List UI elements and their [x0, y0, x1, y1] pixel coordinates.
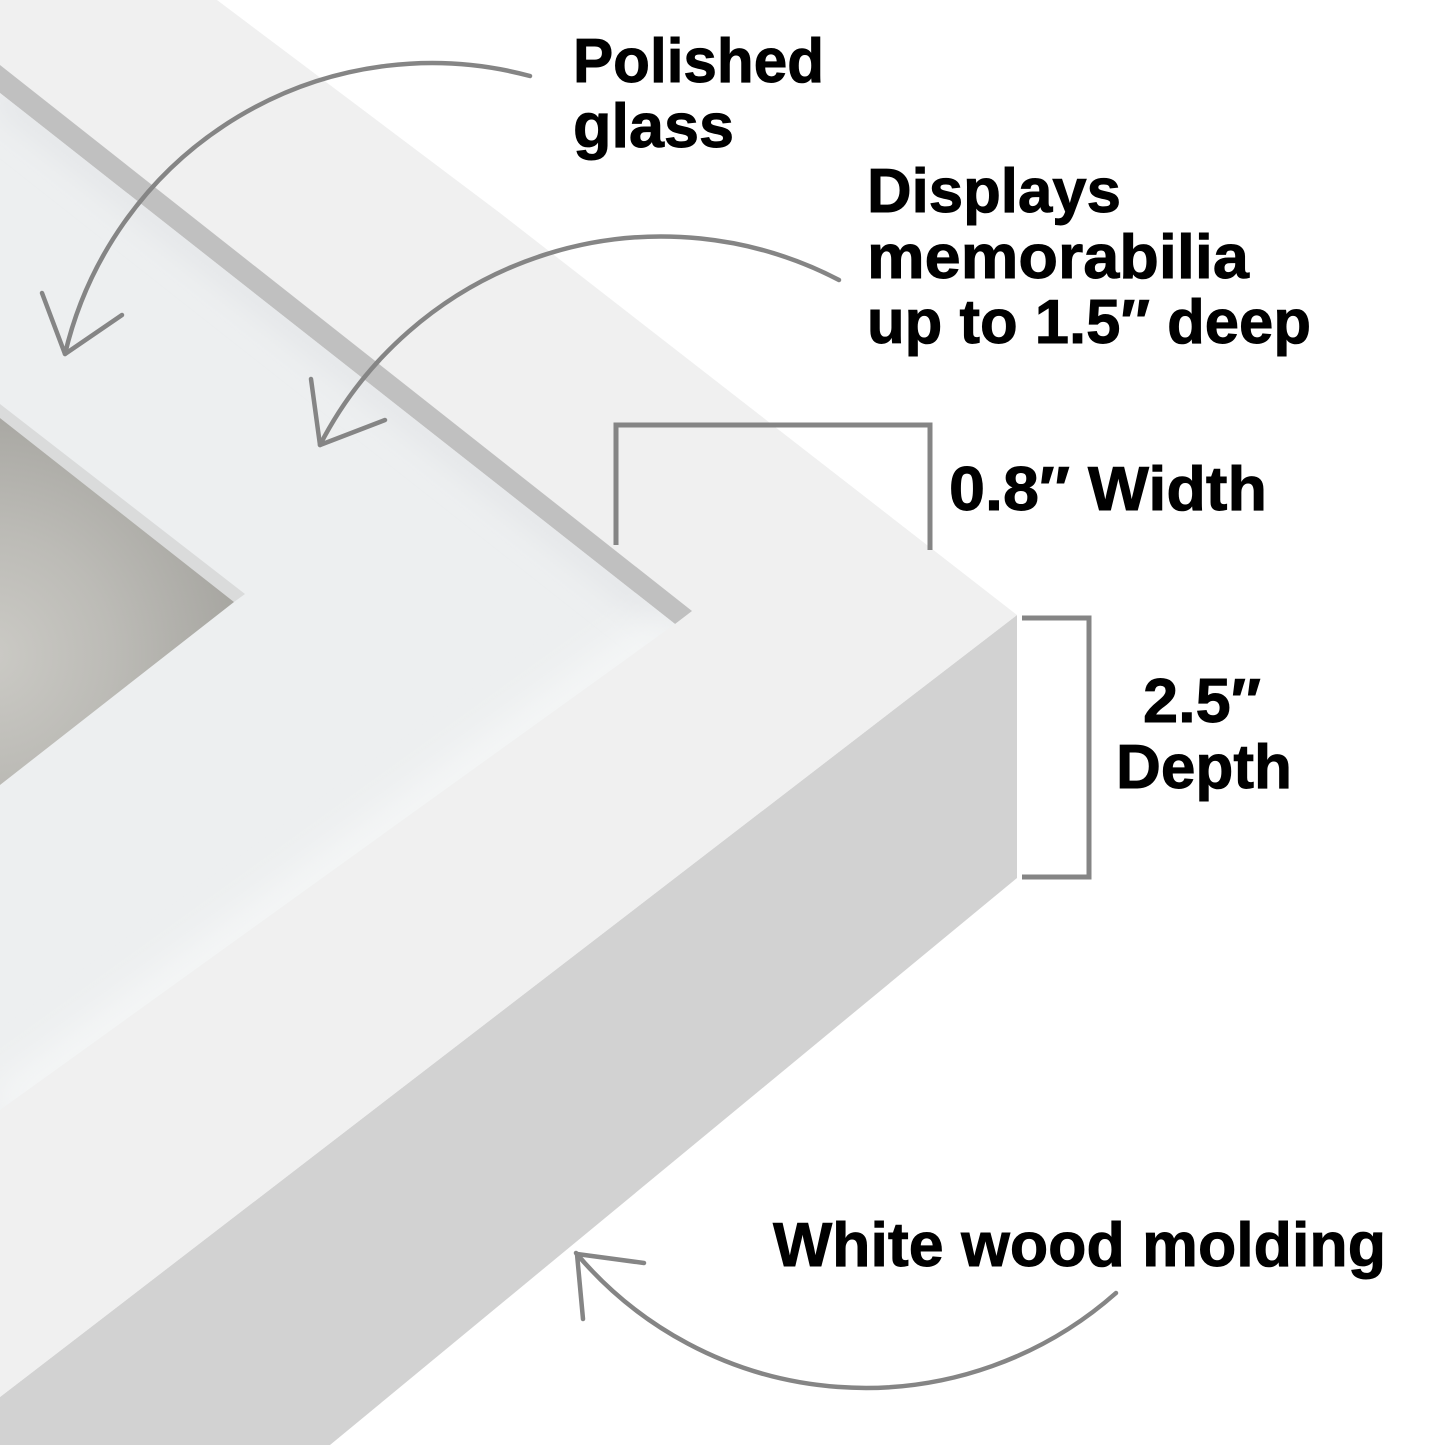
label: displays memorabilia: [867, 157, 1311, 357]
bracket: width: [616, 425, 930, 550]
label: polished glass: glass: [573, 92, 734, 161]
label: white wood molding: White wood molding: [773, 1211, 1386, 1280]
arrow: polished glass: [42, 63, 530, 354]
bracket: depth: [1022, 618, 1089, 877]
frame side face: [0, 615, 1017, 1445]
label: polished glass: Polished: [573, 27, 824, 96]
label: displays memorabilia: memorabilia: [867, 223, 1250, 292]
arrow: memorabilia depth: [311, 237, 839, 445]
arrow: white wood molding: [576, 1253, 1116, 1388]
label: polished glass: [573, 27, 824, 161]
glass edge strip: [0, 65, 692, 624]
backing board: [0, 418, 234, 785]
label: displays memorabilia: up to 1.5″ deep: [867, 288, 1311, 357]
mat opening bevel: [0, 404, 245, 602]
label: depth: 2.5″: [1143, 667, 1261, 736]
frame illustration: [0, 0, 1017, 1445]
label: depth: Depth: [1116, 733, 1292, 802]
frame front molding: [0, 0, 1017, 1397]
label: displays memorabilia: Displays: [867, 157, 1121, 226]
white mat board: [0, 93, 675, 624]
label: depth: [1116, 667, 1292, 802]
label: width: 0.8″ Width: [949, 455, 1267, 524]
